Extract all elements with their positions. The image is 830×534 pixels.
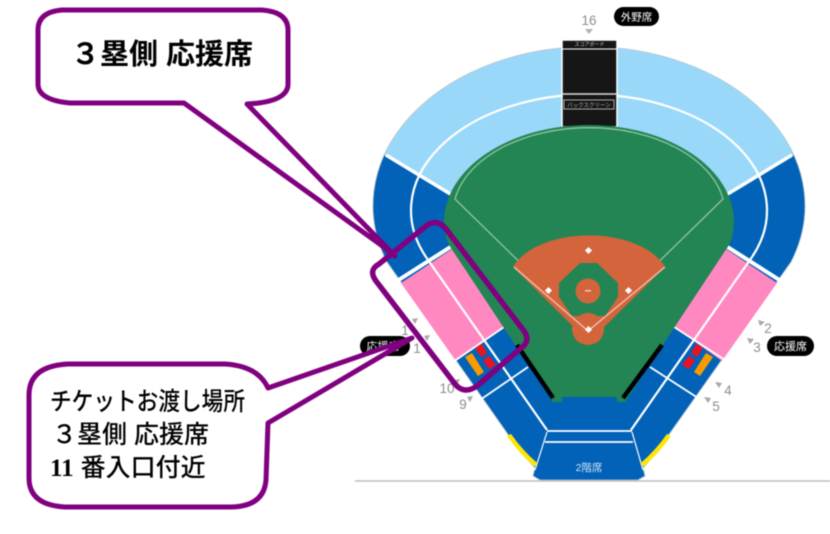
stands: outfield light blue seating <box>384 47 794 195</box>
pill: cheering seats left: 応援席 <box>366 339 400 353</box>
gate markers and numbers: 4 <box>724 383 732 398</box>
back screen <box>562 40 617 127</box>
black fence lines <box>517 345 662 398</box>
highlight frame around third base cheering section <box>373 223 527 390</box>
bases <box>545 247 632 333</box>
gate markers and numbers: 5 <box>712 399 720 414</box>
callout heading: ３塁側 応援席 <box>71 38 253 71</box>
pill: cheering seats right <box>767 336 814 356</box>
pill: cheering seats right: 応援席 <box>774 339 807 353</box>
stadium map <box>360 7 814 480</box>
infield dirt <box>513 235 665 342</box>
gate markers and numbers: 10 <box>439 381 455 396</box>
stands: pink cheering section third base side <box>401 249 507 361</box>
gate markers and numbers: 2 <box>764 321 772 336</box>
pill: outfield seats <box>614 7 659 26</box>
callout: ticket pickup location <box>29 338 412 507</box>
gate markers and numbers: 9 <box>459 397 467 412</box>
second-level seats label: 2階席 <box>576 462 602 474</box>
pill: cheering seats left <box>360 336 410 356</box>
callout text: 11 番入口付近 <box>50 454 206 482</box>
ground line <box>355 480 830 482</box>
gate markers and numbers: 3 <box>753 340 761 355</box>
baselines <box>514 267 665 331</box>
callout bubble <box>38 10 395 256</box>
yellow seats <box>509 435 669 465</box>
playing field <box>444 125 734 402</box>
callout text: チケットお渡し場所 <box>50 388 245 416</box>
callout bubble <box>29 338 412 507</box>
seating divider lines <box>386 94 792 470</box>
callout text: ３塁側 応援席 <box>52 421 209 449</box>
pill: outfield seats: 外野席 <box>621 12 652 24</box>
callout: third base cheering seats <box>38 10 395 256</box>
gate markers and numbers <box>401 13 772 414</box>
stands: infield blue seating <box>373 47 805 480</box>
gate markers and numbers: 1 <box>413 341 421 356</box>
gate markers and numbers: 1 <box>401 323 409 338</box>
special seats first base side <box>682 344 713 376</box>
scoreboard label: スコアボード <box>574 41 605 48</box>
infield grass <box>559 263 618 316</box>
pitcher's mound <box>576 278 600 304</box>
screen label: バックスクリーン <box>567 102 611 109</box>
special seats third base side <box>465 344 496 376</box>
stands: pink cheering section first base side <box>671 249 777 361</box>
callout text <box>50 388 245 482</box>
pitcher's plate <box>585 290 591 292</box>
black screen block <box>562 40 617 127</box>
outfield fence line and foul lines <box>455 128 723 330</box>
gate markers and numbers: 16 <box>581 13 597 28</box>
home plate circle <box>572 313 604 345</box>
